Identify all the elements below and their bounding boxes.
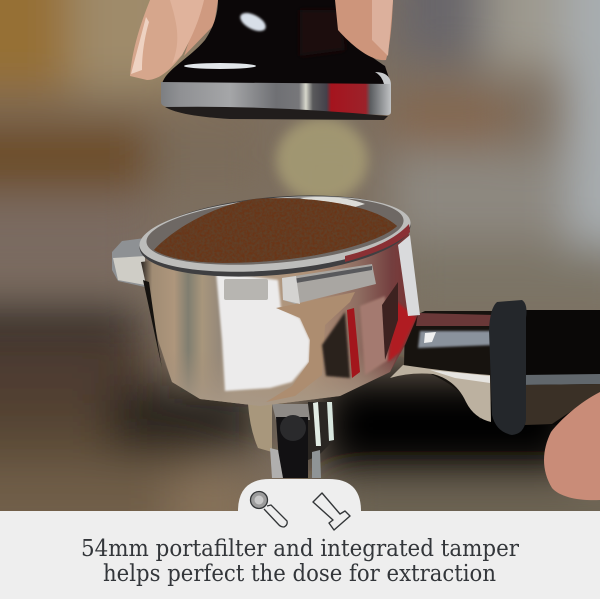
caption text: 54mm portafilter and integrated tamper xyxy=(81,536,519,562)
photo: portafilter basket xyxy=(112,185,420,406)
lip reflection xyxy=(282,264,376,304)
left finger xyxy=(130,0,204,80)
rim inner xyxy=(144,188,406,274)
body bottom sheen xyxy=(160,350,400,406)
caption panel xyxy=(0,479,600,599)
tamper steel band xyxy=(161,82,391,115)
highlight on tamper neck xyxy=(237,9,269,35)
black grip xyxy=(522,310,600,425)
dark reflection with red xyxy=(322,312,350,378)
steel neck xyxy=(404,311,495,420)
caption text: helps perfect the dose for extraction xyxy=(103,561,496,587)
photo: spout under portafilter xyxy=(248,402,334,478)
caption text xyxy=(81,536,519,587)
small grey slot xyxy=(224,279,268,300)
rubber ring xyxy=(489,300,526,435)
steel body xyxy=(141,228,419,406)
white reflection xyxy=(216,272,310,391)
gleam on tamper shoulder xyxy=(375,72,391,84)
brown reflection xyxy=(266,292,355,402)
ground coffee xyxy=(154,198,397,263)
tamper black body xyxy=(162,0,391,84)
blurred lamp glow xyxy=(276,118,368,202)
icon: tamper xyxy=(313,493,350,530)
chrome edges xyxy=(270,448,283,478)
icon: portafilter xyxy=(250,492,287,527)
photo: tamper held in fingers xyxy=(130,0,393,120)
left fingernail xyxy=(131,17,149,74)
rim outer xyxy=(136,185,414,287)
tamper base shadow xyxy=(165,107,388,120)
photo: portafilter handle xyxy=(390,300,600,435)
photo: fingertip at right xyxy=(544,392,600,500)
neck lower highlight xyxy=(390,365,491,422)
back finger xyxy=(184,0,218,56)
left lug xyxy=(112,238,145,287)
right finger xyxy=(335,0,393,60)
highlight on tamper shoulder xyxy=(184,63,256,69)
right edge highlight xyxy=(398,235,420,316)
